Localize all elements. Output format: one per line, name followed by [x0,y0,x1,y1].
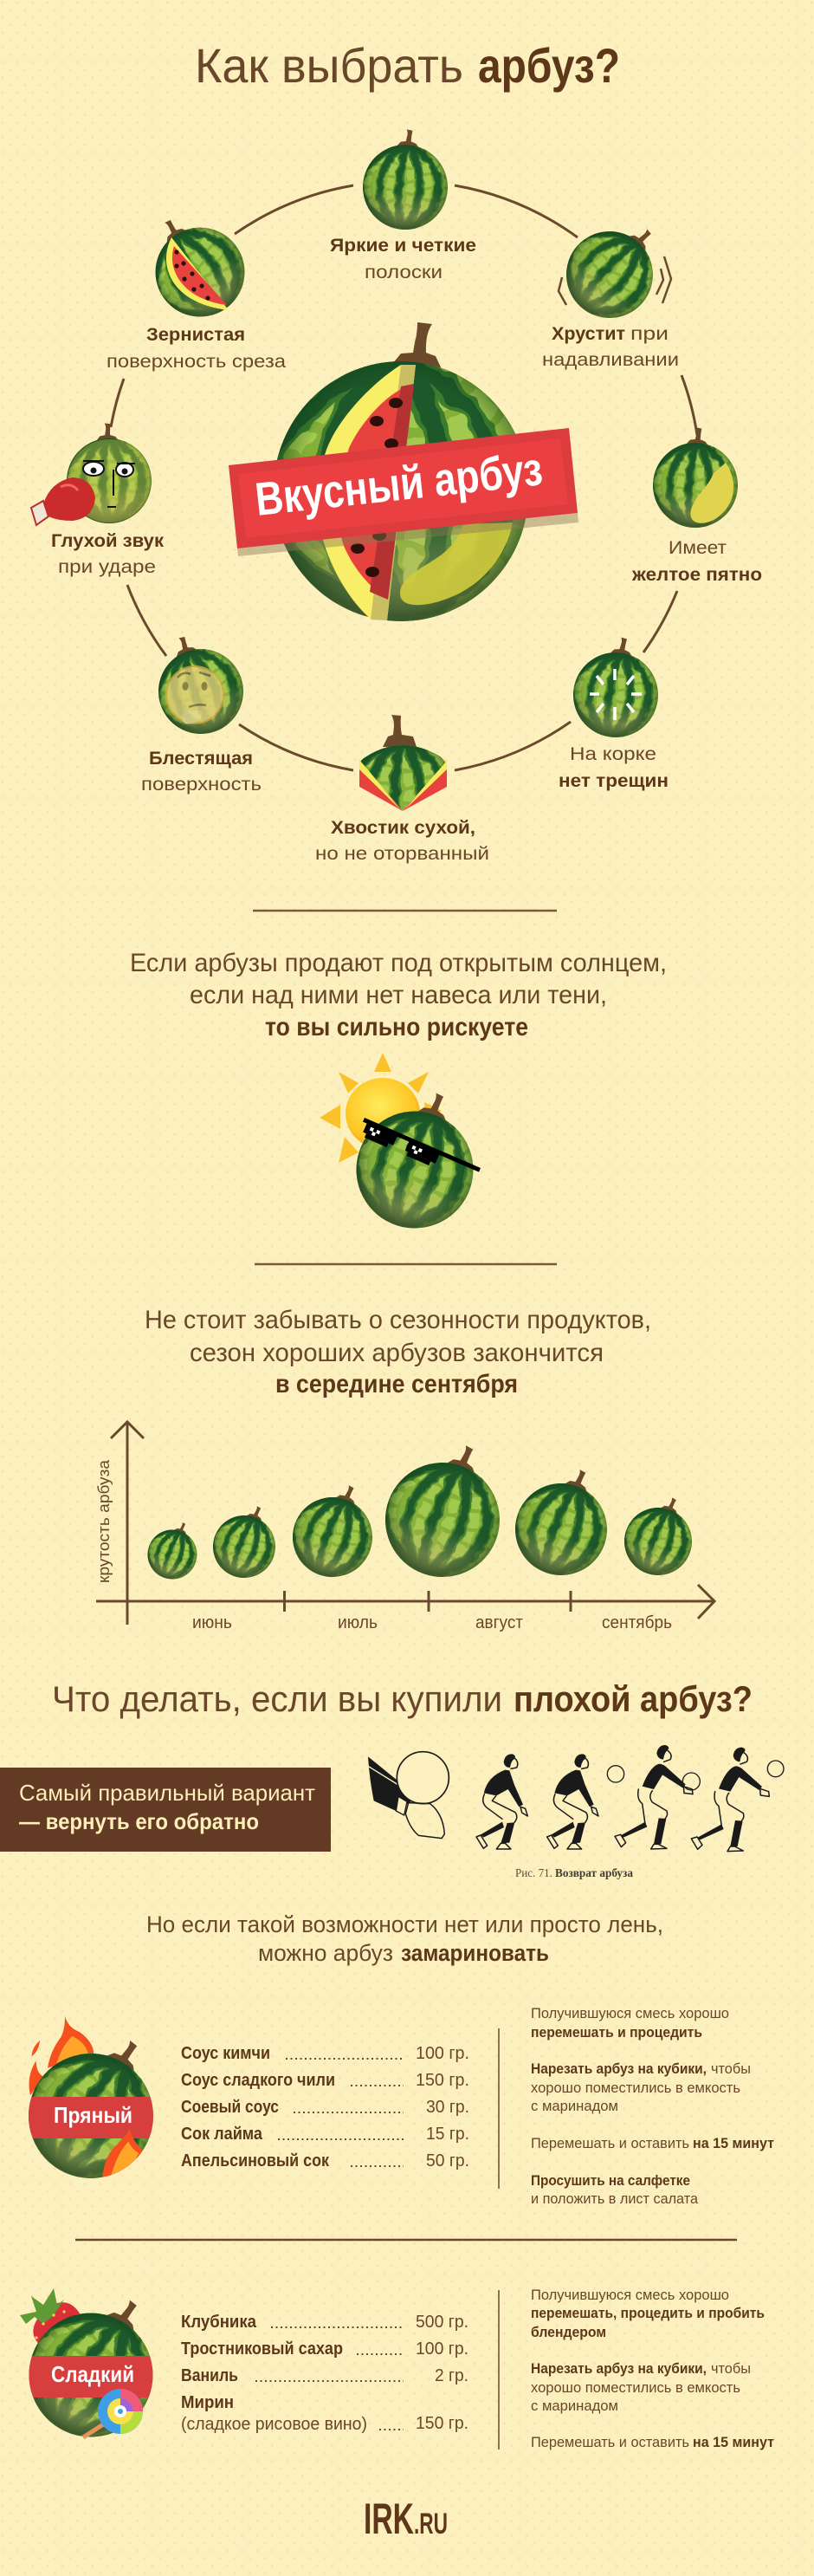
month labels: июнь [192,1613,232,1632]
heading: bad watermelon: плохой арбуз? [514,1678,753,1719]
icon: hand with ball [368,1752,449,1839]
month labels: сентябрь [602,1613,672,1632]
item: yellow spot [631,425,762,585]
text block: marinate: можно арбуз [258,1940,393,1966]
label: stripes [330,235,476,282]
text block: sun warning: если над ними нет навеса или тени, [190,981,607,1009]
callout: return it: Самый правильный вариант [19,1780,315,1806]
item: shiny surface [138,623,262,795]
ingredients list: Соус сладкого чили [181,2071,335,2090]
ingredients list: 150 гр. [416,2071,469,2090]
label: grainy: поверхность среза [107,351,286,372]
icon: watermelon with yellow spot [648,425,740,529]
label: crunches: Хрустит [552,323,625,344]
label: crunches: при [630,323,669,344]
illustration: volleyball figures [368,1745,784,1852]
preparation steps: с маринадом [531,2398,618,2414]
ingredients list: Мирин [181,2393,234,2412]
text block: sun warning: Если арбузы продают под открытым солнцем, [130,949,667,977]
label: yellow spot: Имеет [669,537,727,558]
ball 4 [767,1761,784,1777]
title: арбуз? [478,38,620,93]
heading: bad watermelon [52,1678,753,1719]
preparation steps: Нарезать арбуз на кубики, [531,2061,707,2077]
label: yellow spot [631,537,762,585]
axes [96,1422,714,1625]
ingredients list [181,2044,469,2170]
ring of connecting arcs [111,185,697,770]
preparation steps: хорошо поместились в емкость [531,2380,740,2396]
label: stripes: полоски [365,262,443,282]
caption: Возврат арбуза [555,1867,633,1880]
ingredients list: 2 гр. [435,2366,468,2385]
text block: seasonality: Не стоит забывать о сезонности продуктов, [145,1306,651,1334]
caption: Рис. 71. [515,1867,552,1880]
ingredients list: Тростниковый сахар [181,2339,343,2359]
preparation steps: Получившуюся смесь хорошо [531,2287,729,2303]
label: yellow spot: желтое пятно [631,564,762,585]
text block: sun warning [130,949,667,1041]
item: no cracks [559,632,669,791]
label: dry tail: но не оторванный [315,843,489,864]
preparation steps: с маринадом [531,2099,618,2114]
icon: sweet watermelon with strawberry and lollipop [20,2288,152,2439]
preparation steps: на 15 минут [693,2435,774,2450]
preparation steps: хорошо поместились в емкость [531,2080,740,2096]
label: shiny: поверхность [141,774,262,795]
month labels: август [475,1613,523,1632]
month labels: июль [338,1613,378,1632]
icon: watermelon [337,1074,495,1243]
label: no cracks: На корке [570,743,656,764]
banner text: Вкусный арбуз [253,443,545,526]
title [195,38,620,93]
panel: spicy recipe [2,2006,774,2207]
icon: spicy watermelon with flames: Пряный [54,2102,132,2128]
preparation steps: перемешать, процедить и пробить [531,2306,765,2321]
logo: IRK [364,2495,414,2543]
item: crunches when pressed [542,199,682,370]
item: dull sound [31,422,164,577]
ball 3 [682,1773,700,1790]
ingredients list: Сок лайма [181,2125,263,2144]
y axis label: крутость арбуза [95,1459,113,1583]
figure 1 [476,1754,527,1849]
item: grainy cut surface [107,197,286,372]
preparation steps: на 15 минут [693,2136,774,2151]
icon: sweet watermelon with strawberry and lollipop: Сладкий [51,2361,134,2387]
preparation steps: Нарезать арбуз на кубики, [531,2361,707,2377]
ingredients list: 150 гр. [416,2414,468,2433]
callout: return it [0,1768,331,1852]
icon: striped watermelon [357,127,452,232]
preparation steps: блендером [531,2325,606,2340]
text block: seasonality: сезон хороших арбузов закончится [190,1339,604,1367]
label: stripes: Яркие и четкие [330,235,476,256]
preparation steps: Просушить на салфетке [531,2173,690,2189]
label: dry tail: Хвостик сухой, [331,817,475,838]
label: no cracks: нет трещин [559,770,669,791]
text block: sun warning: то вы сильно рискуете [265,1013,528,1041]
label: dull sound: Глухой звук [51,530,164,551]
label: crunches: надавливании [542,349,679,370]
text block: marinate: замариновать [401,1940,549,1966]
banner [229,428,578,548]
preparation steps: Перемешать и оставить [531,2435,689,2450]
central watermelon with banner [229,322,578,621]
callout: return it: — вернуть его обратно [19,1808,259,1834]
figure 4 [691,1748,769,1852]
text block: seasonality [145,1306,651,1398]
preparation steps [531,2287,774,2450]
preparation steps: и положить в лист салата [531,2191,699,2207]
icon: watermelon with white crack marks [565,632,666,743]
ingredients list: Апельсиновый сок [181,2151,330,2170]
icon: carved watermelon top [359,715,447,811]
preparation steps: чтобы [711,2361,751,2377]
icon: pixel sunglasses [358,1118,481,1184]
preparation steps [531,2006,774,2207]
label: dry tail [315,817,489,864]
icon: watermelon with face and boxing glove [31,422,153,525]
logo: .RU [414,2508,448,2540]
chart: watermelon coolness by month [95,1422,714,1632]
label: shiny: Блестящая [149,748,253,769]
icon: big watermelon [263,322,528,621]
ingredients list: Ваниль [181,2366,238,2385]
preparation steps: чтобы [711,2061,751,2077]
ingredients list: 100 гр. [416,2044,469,2063]
label: grainy [107,324,286,372]
ingredients list: 500 гр. [416,2313,468,2332]
label: crunches [542,323,679,370]
text block: marinate: Но если такой возможности нет или просто лень, [146,1911,663,1937]
ingredients list [181,2313,468,2434]
label: dull sound: при ударе [58,556,156,577]
preparation steps: перемешать и процедить [531,2025,702,2041]
illustration: sun and watermelon in sunglasses [320,1053,495,1243]
ball 2 [607,1766,624,1782]
label: no cracks [559,743,669,791]
ingredients list: Соевый соус [181,2098,279,2117]
ingredients list: 100 гр. [416,2339,468,2359]
heading: bad watermelon: Что делать, если вы купили [52,1678,502,1719]
figure 3 [615,1745,693,1849]
figure 2 [547,1754,598,1849]
ingredients list: Клубника [181,2313,257,2332]
icon: watermelon with reflected thinking face [138,623,255,747]
label: grainy: Зернистая [146,324,245,345]
label: dull sound [51,530,164,577]
watermelons sized by season [139,1425,706,1593]
ingredients list: 15 гр. [426,2125,469,2144]
icon: squeezed watermelon [546,199,682,336]
banner shadow [237,513,578,556]
text block: marinate [146,1911,663,1966]
preparation steps: Получившуюся смесь хорошо [531,2006,729,2021]
icon: sun [320,1053,442,1163]
preparation steps: Перемешать и оставить [531,2136,689,2151]
panel: sweet recipe [20,2288,774,2450]
ingredients list: Соус кимчи [181,2044,270,2063]
label: shiny [141,748,262,795]
month labels [192,1613,672,1632]
icon: spicy watermelon with flames [29,2015,153,2178]
ingredients list: (сладкое рисовое вино) [181,2415,367,2434]
title: Как выбрать [195,38,463,93]
text block: seasonality: в середине сентября [275,1370,518,1398]
ingredients list: 30 гр. [426,2098,469,2117]
caption [515,1867,633,1880]
ingredients list: 50 гр. [426,2151,469,2170]
item: dry tail [315,715,489,864]
item: bright stripes [330,127,476,282]
icon: watermelon with slice [126,197,262,335]
